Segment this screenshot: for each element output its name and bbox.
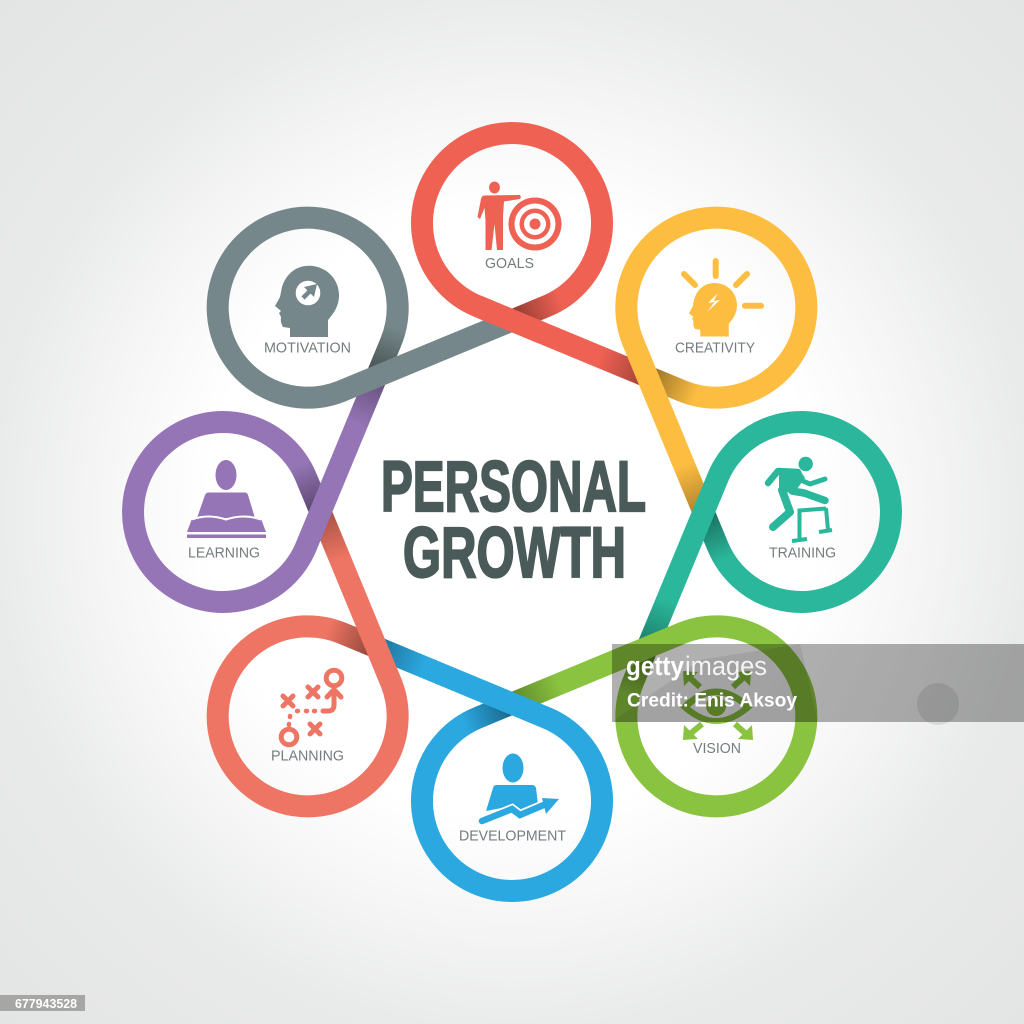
panel: learning <box>133 376 377 602</box>
ribbon: creativity <box>544 180 876 512</box>
icon: head with idea rays <box>684 261 761 336</box>
panel: goals <box>422 133 648 377</box>
ribbon: planning <box>148 512 480 844</box>
icon: person with rising arrow <box>482 754 559 821</box>
ribbon: learning <box>133 376 377 602</box>
label: creativity: CREATIVITY <box>675 340 755 356</box>
icon: hurdle runner <box>768 457 832 541</box>
icon: head with arrow <box>275 266 339 337</box>
icon: strategy plan <box>281 670 342 745</box>
watermark band: Credit: Enis Aksoy <box>627 690 797 712</box>
label: goals: GOALS <box>485 255 534 272</box>
panel: creativity <box>544 180 876 512</box>
watermark band: images <box>685 651 767 681</box>
ribbon: development <box>376 647 602 891</box>
label: vision: VISION <box>693 740 741 757</box>
icon: eye with arrows <box>680 671 753 740</box>
label: development: DEVELOPMENT <box>459 828 566 844</box>
image id tag <box>0 995 85 1011</box>
label: planning: PLANNING <box>271 748 344 764</box>
watermark band <box>612 644 1024 725</box>
image id tag: 677943528 <box>15 997 77 1011</box>
panel: planning <box>148 512 480 844</box>
ribbon: goals <box>422 133 648 377</box>
ribbon: training <box>647 422 891 648</box>
label: training: TRAINING <box>769 544 836 562</box>
panel: motivation <box>180 148 512 480</box>
title: PERSONAL <box>381 448 646 527</box>
icon: person reading book <box>187 460 266 538</box>
ribbon: vision <box>512 544 844 876</box>
panel: development <box>376 647 602 891</box>
icon: person and target <box>478 182 562 250</box>
title: GROWTH <box>403 514 626 593</box>
title <box>381 448 646 593</box>
label: motivation: MOTIVATION <box>264 340 351 356</box>
ribbon overlap: goals tail over motivation tail <box>478 306 542 333</box>
ribbon: motivation <box>180 148 512 480</box>
watermark band: getty <box>626 651 684 681</box>
label: learning: LEARNING <box>188 544 260 562</box>
panel: vision <box>512 544 844 876</box>
panel: training <box>647 422 891 648</box>
